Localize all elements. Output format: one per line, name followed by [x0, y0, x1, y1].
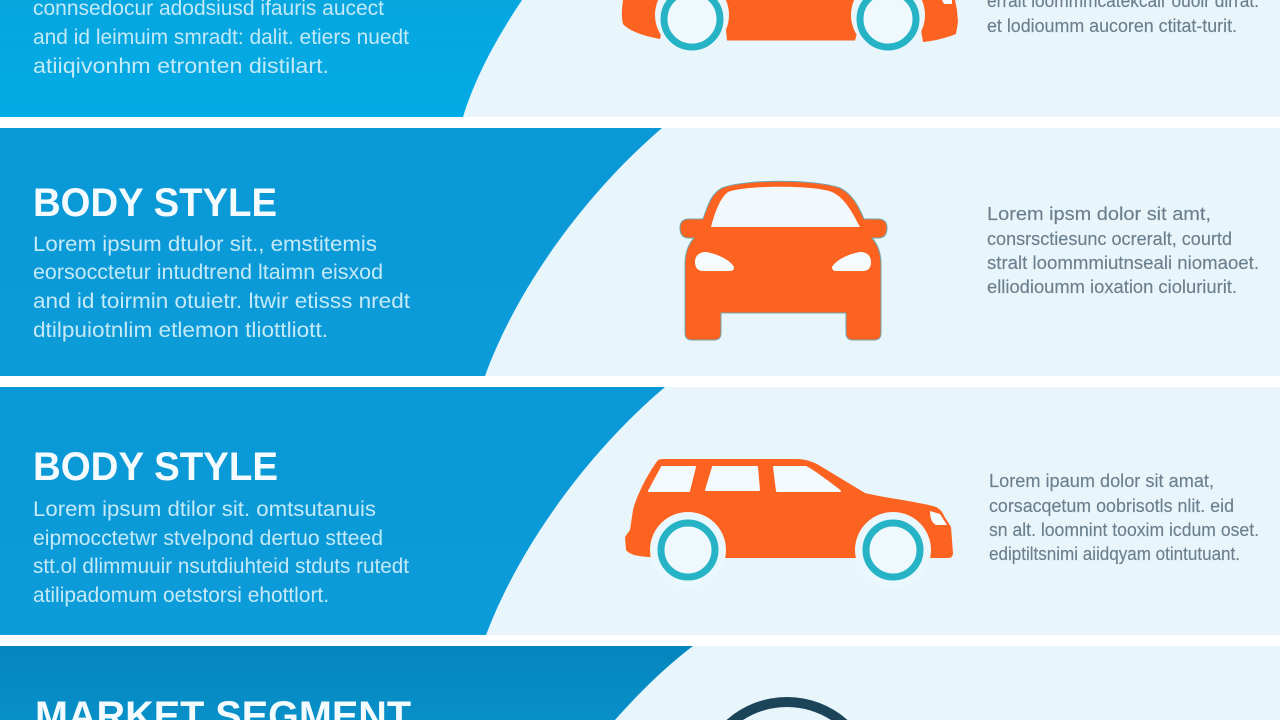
heading: BODY STYLE	[33, 445, 278, 489]
description text: atilipadomum oetstorsi ehottlort.	[33, 584, 329, 607]
side description text: corsacqetum oobrisotls nlit. eid	[989, 496, 1234, 516]
icon: dark ring (partial)	[726, 697, 848, 720]
heading: BODY STYLE	[33, 181, 277, 225]
side description text	[989, 471, 1259, 564]
panel: top row (partial)	[0, 0, 1280, 117]
description text: Lorem ipsum dtulor sit., emstitemis	[33, 233, 377, 256]
description text	[33, 498, 409, 607]
panel: body style side view	[0, 387, 1280, 635]
description text: eipmocctetwr stvelpond dertuo stteed	[33, 527, 383, 550]
panel: body style front view	[0, 128, 1280, 376]
description text	[33, 233, 410, 342]
description text	[33, 0, 409, 78]
side description text: Lorem ipsm dolor sit amt,	[987, 204, 1211, 224]
side description text: Lorem ipaum dolor sit amat,	[989, 471, 1214, 491]
icon: orange side-view car	[622, 0, 958, 50]
side description text: stralt loommmiutnseali niomaoet.	[987, 253, 1259, 273]
description text: and id toirmin otuietr. ltwir etisss nredt	[33, 290, 410, 313]
side description text: et lodioumm aucoren ctitat-turit.	[987, 16, 1237, 36]
blue curved panel	[0, 646, 693, 720]
description text: dtilpuiotnlim etlemon tliottliott.	[33, 319, 328, 342]
description text: eorsocctetur intudtrend ltaimn eisxod	[33, 261, 383, 284]
side description text: consrsctiesunc ocreralt, courtd	[987, 229, 1232, 249]
description text: Lorem ipsum dtilor sit. omtsutanuis	[33, 498, 376, 521]
side description text: elliodioumm ioxation cioluriurit.	[987, 277, 1237, 297]
side description text	[987, 204, 1259, 297]
blue curved panel	[0, 0, 522, 117]
side description text: sn alt. loomnint tooxim icdum oset.	[989, 520, 1259, 540]
panel: market segment	[0, 646, 1280, 720]
description text: atiiqivonhm etronten distilart.	[33, 55, 329, 78]
description text: and id leimuim smradt: dalit. etiers nuedt	[33, 26, 409, 49]
side description text	[987, 0, 1259, 36]
description text: stt.ol dlimmuuir nsutdiuhteid stduts rutedt	[33, 555, 409, 578]
blue curved panel	[0, 387, 665, 635]
icon: orange SUV side view	[625, 459, 953, 588]
side description text: ediptiltsnimi aiidqyam otintutuant.	[989, 544, 1240, 564]
icon: orange front-view car	[680, 181, 887, 340]
blue curved panel	[0, 128, 662, 376]
